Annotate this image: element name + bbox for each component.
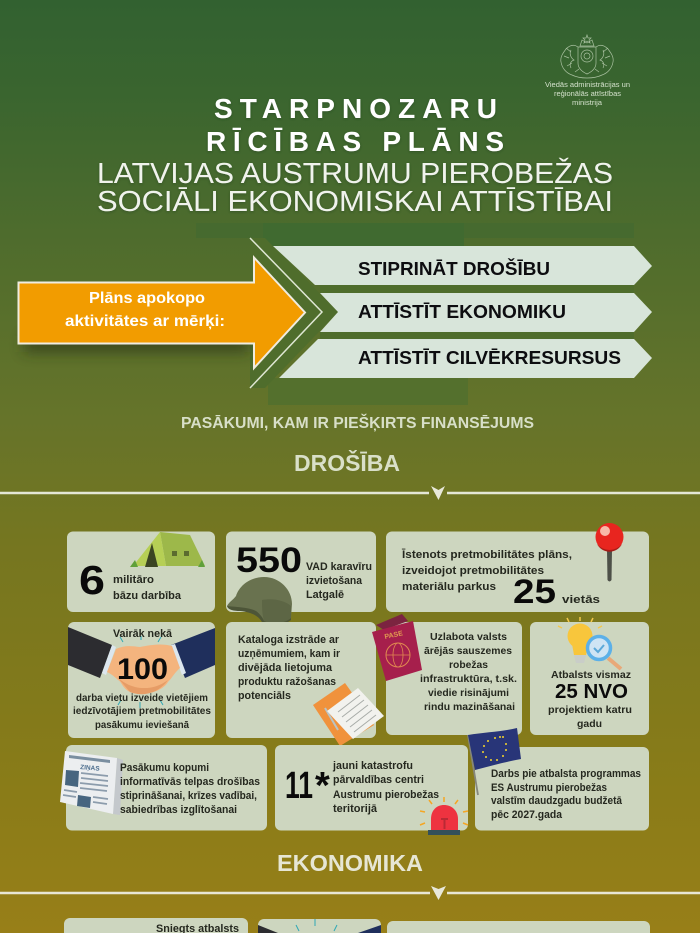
icon: handshake bbox=[68, 627, 215, 708]
panel: 100 jobs: 100 bbox=[117, 653, 168, 686]
panel: disaster management centres bbox=[275, 745, 468, 835]
panel: anti-mobility plan: 25 bbox=[513, 573, 556, 611]
panel: military bases: bāzu darbība bbox=[113, 590, 182, 602]
panel: dual-use catalogue bbox=[226, 622, 384, 746]
section heading: security: DROŠĪBA bbox=[294, 449, 400, 476]
panel: cropped card bbox=[387, 921, 650, 933]
panel: information rooms: Pasākumu kopumi bbox=[120, 762, 209, 774]
panel: information rooms: informatīvās telpas drošības bbox=[120, 776, 260, 788]
title: LATVIJAS AUSTRUMU PIEROBEŽAS bbox=[97, 158, 613, 190]
chevron line bbox=[250, 238, 322, 388]
panel: NGO support: gadu bbox=[577, 718, 602, 730]
panel: handshake (cropped) bbox=[258, 919, 381, 933]
panel: 100 jobs: pasākumu ieviešanā bbox=[95, 719, 189, 731]
ministry logo bbox=[545, 35, 630, 107]
panel: 100 jobs: darba vietu izveide vietējiem bbox=[76, 692, 208, 704]
text: ministry name: Viedās administrācijas un bbox=[545, 80, 630, 89]
text: ministry name: ministrija bbox=[572, 98, 603, 107]
panel: military bases bbox=[67, 532, 215, 612]
ribbon: economy: ATTĪSTĪT EKONOMIKU bbox=[358, 302, 566, 322]
panel: disaster management centres: jauni katastrofu bbox=[332, 760, 413, 772]
section heading: economy: EKONOMIKA bbox=[277, 850, 423, 876]
panel: dual-use catalogue: Kataloga izstrāde ar bbox=[238, 634, 340, 646]
panel: disaster management centres: * bbox=[315, 765, 330, 807]
ribbon: economy bbox=[320, 293, 652, 332]
panel: VAD soldiers: VAD karavīru bbox=[306, 561, 372, 573]
panel: anti-mobility plan: vietās bbox=[562, 594, 600, 606]
panel: anti-mobility plan: izveidojot pretmobilitātes bbox=[402, 565, 544, 577]
panel: anti-mobility plan: materiālu parkus bbox=[402, 581, 496, 593]
panel: anti-mobility plan: Īstenots pretmobilitātes plāns, bbox=[401, 549, 572, 561]
panel: VAD soldiers: Latgalē bbox=[306, 589, 344, 601]
section heading: security bbox=[0, 449, 700, 500]
panel: disaster management centres: teritorijā bbox=[333, 803, 378, 815]
panel: disaster management centres: pārvaldības centri bbox=[333, 774, 424, 786]
panel: NGO support: 25 NVO bbox=[555, 681, 628, 703]
title: SOCIĀLI EKONOMISKAI ATTĪSTĪBAI bbox=[97, 186, 613, 218]
panel: border infrastructure bbox=[372, 614, 522, 735]
panel: dual-use catalogue: potenciāls bbox=[238, 690, 291, 702]
panel: NGO support: projektiem katru bbox=[548, 704, 632, 716]
panel: border infrastructure: ārējās sauszemes bbox=[424, 645, 512, 657]
ribbon: human resources bbox=[279, 339, 652, 378]
subheading: PASĀKUMI, KAM IR PIEŠĶIRTS FINANSĒJUMS bbox=[181, 414, 534, 432]
ribbon: security bbox=[273, 246, 652, 285]
panel: support (cropped) bbox=[64, 918, 248, 933]
icon: passport bbox=[372, 614, 422, 681]
title: RĪCĪBAS PLĀNS bbox=[206, 126, 504, 157]
panel: 100 jobs: Vairāk nekā bbox=[113, 628, 173, 640]
title bbox=[97, 93, 613, 218]
arrow: plan summary bbox=[18, 258, 305, 368]
panel: NGO support bbox=[530, 617, 649, 735]
panel: military bases: militāro bbox=[113, 574, 154, 586]
panel: EU programme: Darbs pie atbalsta programmas bbox=[491, 768, 641, 780]
ribbon: security: STIPRINĀT DROŠĪBU bbox=[358, 258, 550, 279]
panel: 100 jobs: iedzīvotājiem pretmobilitātes bbox=[73, 705, 211, 717]
goals diagram bbox=[18, 238, 652, 388]
panel: information rooms bbox=[60, 745, 267, 830]
panel: VAD soldiers bbox=[226, 532, 376, 625]
panel: dual-use catalogue: uzņēmumiem, kam ir bbox=[238, 648, 341, 660]
section heading: economy bbox=[0, 850, 700, 900]
panel: border infrastructure: infrastruktūra, t.sk. bbox=[420, 673, 517, 685]
panel: border infrastructure: robežas bbox=[449, 659, 488, 671]
panel: disaster management centres: Austrumu pierobežas bbox=[333, 789, 439, 801]
text: ministry name: reģionālās attīstības bbox=[554, 89, 621, 98]
panel: EU programme: valstīm daudzgadu budžetā bbox=[491, 795, 623, 807]
icon: newspaper bbox=[60, 751, 123, 815]
icon: tent bbox=[130, 532, 205, 567]
title: STARPNOZARU bbox=[214, 93, 497, 124]
panel: information rooms: stiprināšanai, krīzes vadībai, bbox=[120, 790, 257, 802]
icon: passport: PASE bbox=[384, 630, 404, 641]
decorative darker bands bbox=[196, 223, 634, 238]
text: ministry name bbox=[545, 80, 630, 107]
panel: dual-use catalogue: produktu ražošanas bbox=[238, 676, 336, 688]
panel: EU programme bbox=[468, 728, 649, 830]
arrow: plan summary: aktivitātes ar mērķi: bbox=[65, 313, 225, 330]
icon: helmet bbox=[227, 577, 292, 625]
arrow shadow bbox=[24, 336, 249, 352]
panel: border infrastructure: rindu mazināšanai bbox=[424, 701, 515, 713]
icon: folder with papers bbox=[313, 683, 384, 746]
panel: NGO support: Atbalsts vismaz bbox=[551, 669, 631, 681]
icon: newspaper: ZIŅAS bbox=[80, 764, 101, 773]
icon: siren bbox=[420, 797, 468, 835]
panel: dual-use catalogue: divējāda lietojuma bbox=[238, 662, 333, 674]
panel: EU programme: ES Austrumu pierobežas bbox=[491, 782, 607, 794]
icon: map pin bbox=[596, 523, 624, 582]
panel: 100 jobs bbox=[68, 622, 215, 738]
panel: military bases: 6 bbox=[79, 557, 105, 603]
icon: EU flag bbox=[468, 728, 521, 795]
panel: border infrastructure: Uzlabota valsts bbox=[430, 631, 507, 643]
panel: anti-mobility plan bbox=[386, 523, 649, 612]
panel: VAD soldiers: izvietošana bbox=[306, 575, 363, 587]
arrow: plan summary: Plāns apokopo bbox=[89, 290, 205, 307]
icon: light bulb with magnifier bbox=[558, 617, 621, 669]
panel: information rooms: sabiedrības izglītošanai bbox=[120, 804, 237, 816]
panel: border infrastructure: viedie risinājumi bbox=[428, 687, 509, 699]
ribbon: human resources: ATTĪSTĪT CILVĒKRESURSUS bbox=[358, 348, 621, 368]
panel: EU programme: pēc 2027.gada bbox=[491, 809, 563, 821]
icon: coat of arms bbox=[561, 35, 613, 78]
panel: VAD soldiers: 550 bbox=[236, 541, 302, 580]
panel: disaster management centres: 11 bbox=[285, 765, 313, 807]
